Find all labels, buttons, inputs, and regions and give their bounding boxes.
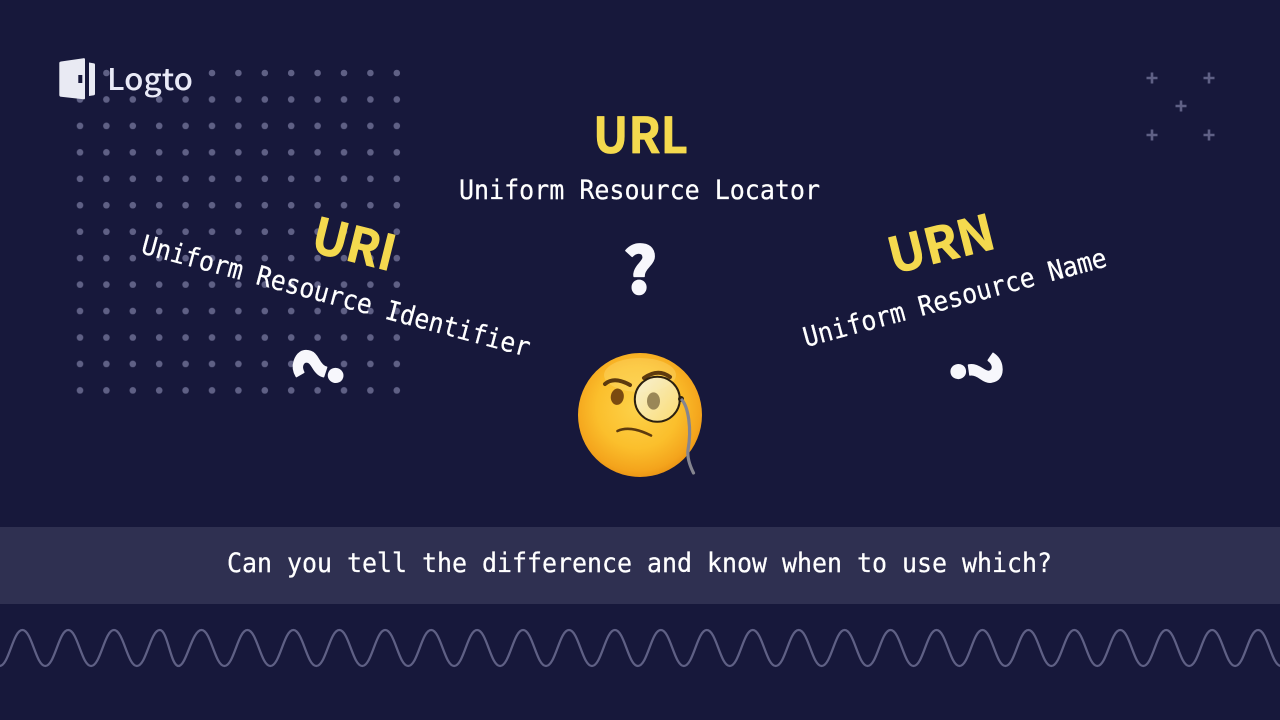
- caption band: [0, 527, 1280, 604]
- logo: Logto: [59, 55, 193, 99]
- icon: door: [59, 58, 95, 99]
- icon: tilted question mark: ?: [931, 346, 1027, 393]
- icon: face with monocle emoji: [578, 353, 702, 477]
- icon: tilted question mark: ?: [267, 338, 365, 399]
- logo wordmark: Logto: [107, 55, 193, 99]
- label: Uniform Resource Identifier: Uniform Resource Identifier: [138, 230, 534, 364]
- panel: URI: [138, 197, 534, 399]
- heading: URI: URI: [305, 197, 404, 286]
- panel: URL: [459, 97, 820, 312]
- dot grid pattern: [67, 70, 410, 404]
- label: Uniform Resource Name: Uniform Resource Name: [800, 243, 1110, 354]
- panel: URN: [800, 194, 1110, 393]
- decorative wave: [0, 630, 1280, 666]
- caption text: Can you tell the difference and know when to use which?: [227, 548, 1052, 579]
- decorative plus cluster: [1146, 72, 1214, 140]
- label: Uniform Resource Locator: Uniform Resource Locator: [459, 175, 820, 206]
- heading: URN: URN: [879, 194, 1001, 289]
- icon: question mark: ?: [623, 220, 657, 312]
- heading: URL: URL: [593, 97, 688, 168]
